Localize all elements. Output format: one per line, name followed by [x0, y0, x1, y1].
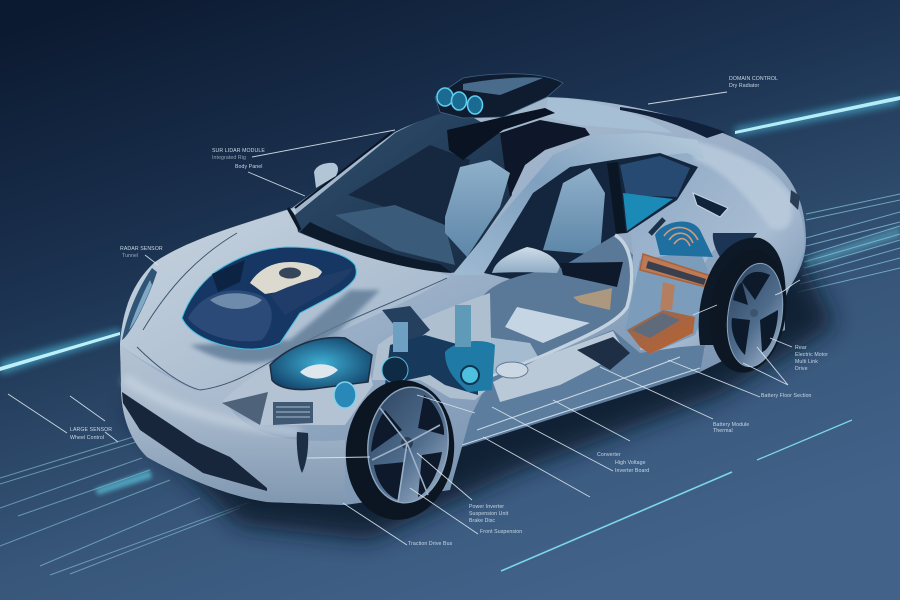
side glass [484, 153, 698, 290]
hood crease lines [137, 233, 447, 390]
label: rear wheel: Rear [795, 345, 807, 351]
bumper vent [122, 392, 267, 491]
label: front wheel: Suspension Unit [469, 511, 509, 517]
label: sill: Battery Floor Section [761, 393, 812, 399]
front headlamp cutaway [222, 337, 373, 425]
label: front wheel: Power Inverter [469, 504, 504, 510]
label: chassis [597, 452, 649, 474]
label: mid battery: Thermal [713, 428, 733, 434]
label: rear wheel: Multi Link [795, 359, 818, 365]
label: front wheel: Brake Disc [469, 518, 495, 524]
rear wheel [699, 238, 794, 378]
label: top right: Dry Radiator [729, 83, 759, 89]
hub disc on floor [496, 362, 528, 378]
windscreen [288, 110, 512, 273]
car shadow [125, 240, 835, 540]
central powertrain cutaway [372, 293, 495, 400]
label: chassis: Converter [597, 452, 621, 458]
bonnet [120, 208, 450, 392]
bonnet battery pack cutaway [182, 247, 380, 363]
label: left radar: RADAR SENSOR [120, 246, 163, 252]
wing mirror [492, 247, 560, 273]
label: top right [729, 76, 778, 89]
label: top left sensor [212, 148, 265, 170]
label: rear wheel: Electric Motor [795, 352, 828, 358]
front seat [445, 160, 510, 257]
label: left radar: Tunnel [122, 253, 138, 259]
label: chassis: High Voltage [615, 460, 646, 466]
label: top left sensor: Body Panel [235, 164, 263, 170]
silver A pillar and roof rail [452, 133, 705, 275]
rear quarter panel [625, 146, 804, 350]
rear cabin seat [543, 168, 605, 255]
dark rear roof strip [620, 107, 725, 138]
label: mid battery: Battery Module [713, 422, 749, 428]
front wheel [339, 375, 461, 525]
label: front brake: Front Suspension [480, 529, 522, 535]
door opening interior [480, 235, 633, 377]
label: left radar [120, 246, 163, 259]
black glass roof [500, 120, 590, 197]
label: lower left: LARGE SENSOR [70, 427, 112, 433]
sill [462, 330, 705, 447]
silver roof [545, 98, 673, 133]
label: mid battery [713, 422, 749, 434]
rear powertrain, coil and battery cutaway [625, 193, 757, 354]
leader lines [8, 92, 800, 545]
car [120, 74, 806, 525]
label: front tyre: Traction Drive Bus [408, 541, 453, 547]
front bumper [120, 345, 345, 505]
label: lower left [70, 427, 112, 441]
body shell [120, 97, 806, 505]
label: top left sensor: Integrated Rig [212, 155, 246, 161]
left headlight [122, 268, 157, 340]
label: rear wheel [795, 345, 828, 372]
label: rear wheel: Drive [795, 366, 808, 372]
label: front wheel [469, 504, 509, 524]
label: top left sensor: SUR LIDAR MODULE [212, 148, 265, 154]
mirror left [314, 163, 338, 188]
sensor pod on roof [435, 74, 563, 160]
label: chassis: Inverter Board [615, 468, 649, 474]
label: top right: DOMAIN CONTROL [729, 76, 778, 82]
cut-away rear window [620, 156, 690, 197]
tail light [790, 190, 800, 210]
label: lower left: Wheel Control [70, 435, 104, 441]
